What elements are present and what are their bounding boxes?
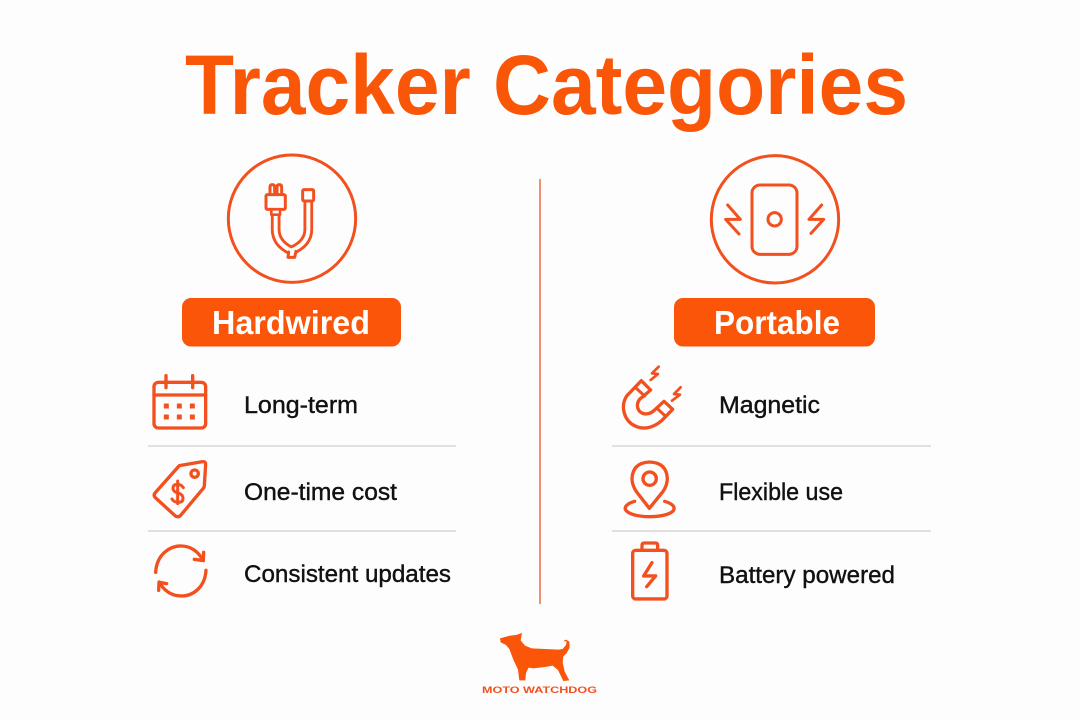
icon: refresh arrows	[156, 546, 206, 596]
icon: location pin	[625, 462, 674, 517]
logo: Moto Watchdog	[482, 633, 597, 696]
icon: magnet	[623, 367, 681, 428]
row: Battery powered: Battery powered	[719, 562, 895, 589]
row: Consistent updates	[156, 546, 451, 596]
row: Flexible use	[625, 462, 843, 517]
icon: price tag	[154, 462, 206, 517]
badge: Hardwired	[182, 298, 401, 346]
row: Flexible use: Flexible use	[719, 479, 843, 506]
icon: battery	[633, 543, 667, 599]
logo: Moto Watchdog: MOTO WATCHDOG	[482, 685, 597, 696]
icon: wire harness in circle	[228, 155, 356, 282]
row: Battery powered	[633, 543, 895, 599]
badge: Hardwired: Hardwired	[212, 304, 370, 341]
row: One-time cost: One-time cost	[244, 479, 397, 506]
panel: portable	[612, 156, 931, 599]
row: Long-term: Long-term	[244, 392, 358, 419]
panel: hardwired	[148, 155, 456, 596]
badge: Portable	[674, 298, 875, 346]
badge: Portable: Portable	[714, 304, 840, 341]
icon: dog silhouette	[500, 633, 570, 681]
row: Magnetic: Magnetic	[719, 392, 820, 419]
icon: portable tracker in circle	[711, 156, 839, 283]
row: Magnetic	[623, 367, 820, 428]
row: Consistent updates: Consistent updates	[244, 561, 451, 588]
row: Long-term	[154, 376, 358, 428]
title: Tracker Categories	[185, 38, 908, 132]
row: One-time cost	[154, 462, 397, 517]
icon: calendar	[154, 376, 206, 428]
